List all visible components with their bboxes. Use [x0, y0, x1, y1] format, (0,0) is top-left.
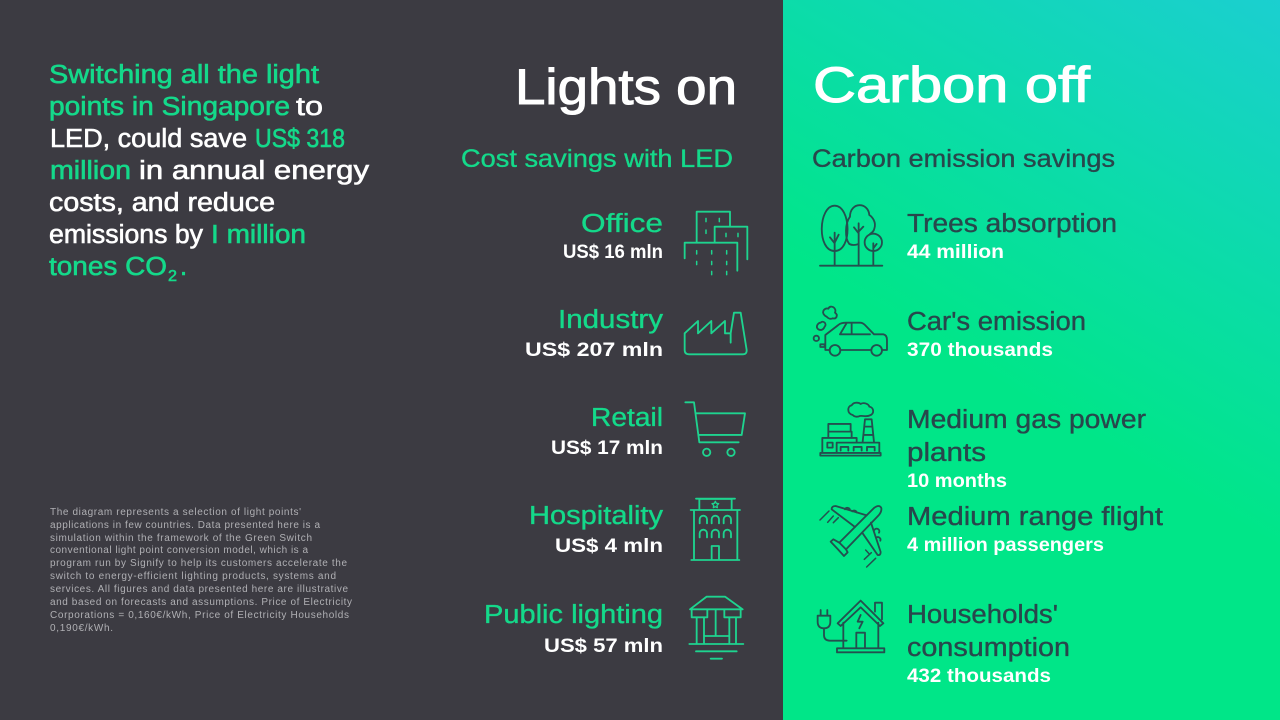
icon: hotel	[691, 499, 740, 560]
intro paragraph: costs, and reduce	[49, 189, 275, 217]
intro paragraph: LED, could save	[50, 125, 247, 153]
row: Medium gas power plants: Medium gas power	[907, 406, 1147, 434]
row: Medium range flight: Medium range flight	[907, 503, 1163, 531]
row: Trees absorption	[907, 210, 1117, 263]
row: Medium range flight: 4 million passengers	[907, 535, 1104, 556]
row: Car's emission: Car's emission	[907, 308, 1086, 336]
intro paragraph: .	[180, 253, 187, 281]
row: Industry: Industry	[558, 306, 663, 334]
icon: airplane	[820, 506, 881, 567]
intro paragraph: million	[50, 157, 131, 185]
row: Hospitality: US$ 4 mln	[555, 536, 663, 557]
footnote text block	[50, 507, 352, 634]
icon: office buildings	[685, 212, 747, 275]
icon: factory	[685, 313, 747, 354]
row: Households' consumption: 432 thousands	[907, 666, 1051, 687]
intro paragraph: emissions by	[49, 221, 203, 249]
row: Medium gas power plants: 10 months	[907, 471, 1007, 492]
intro paragraph	[49, 61, 369, 285]
row: Industry	[525, 306, 663, 361]
row: Medium gas power plants	[907, 406, 1147, 492]
row: Households' consumption	[907, 601, 1070, 687]
row: Hospitality	[529, 502, 663, 557]
row: Car's emission: 370 thousands	[907, 340, 1053, 361]
intro paragraph: in annual energy	[139, 157, 369, 185]
row: Retail: US$ 17 mln	[551, 438, 663, 459]
row: Households' consumption: Households'	[907, 601, 1058, 629]
intro paragraph: to	[296, 93, 323, 121]
row: Medium gas power plants: plants	[907, 439, 986, 467]
intro paragraph: Switching all the light	[49, 61, 319, 89]
row: Public lighting: Public lighting	[484, 601, 663, 629]
icon: public building	[689, 597, 743, 659]
row: Industry: US$ 207 mln	[525, 340, 663, 361]
footnote text block: 0,190€/kWh.	[50, 623, 113, 634]
heading: Lights on: Lights on	[515, 59, 737, 115]
row: Office: Office	[581, 210, 663, 238]
row: Trees absorption: Trees absorption	[907, 210, 1117, 238]
row: Trees absorption: 44 million	[907, 242, 1004, 263]
intro paragraph: points in Singapore	[49, 93, 290, 121]
row: Medium range flight	[907, 503, 1163, 556]
row: Retail: Retail	[591, 404, 663, 432]
row: Public lighting: US$ 57 mln	[544, 636, 663, 657]
row: Public lighting	[484, 601, 663, 657]
footnote text block: switch to energy-efficient lighting products, systems and	[50, 571, 336, 582]
panel: dark background	[0, 0, 783, 720]
icon: house with plug	[818, 601, 884, 652]
footnote text block: services. All figures and data presented here are illustrative	[50, 584, 348, 595]
subheading: Carbon emission savings: Carbon emission savings	[812, 145, 1115, 173]
heading: Carbon off: Carbon off	[813, 57, 1090, 113]
intro paragraph: US$ 318	[255, 125, 345, 153]
footnote text block: The diagram represents a selection of light points'	[50, 507, 301, 518]
footnote text block: applications in few countries. Data presented here is a	[50, 520, 320, 531]
subheading: Cost savings with LED: Cost savings with LED	[461, 145, 733, 173]
footnote text block: Corporations = 0,160€/kWh, Price of Electricity Households	[50, 610, 349, 621]
footnote text block: and based on forecasts and assumptions. Price of Electricity	[50, 597, 352, 608]
footnote text block: program run by Signify to help its customers accelerate the	[50, 558, 347, 569]
panel: green gradient background	[783, 0, 1280, 720]
icon: trees	[820, 205, 882, 266]
row: Hospitality: Hospitality	[529, 502, 663, 530]
footnote text block: simulation within the framework of the Green Switch	[50, 533, 312, 544]
row: Office	[563, 210, 663, 263]
icon: shopping cart	[685, 402, 745, 456]
intro paragraph: tones CO	[49, 253, 167, 281]
row: Households' consumption: consumption	[907, 634, 1070, 662]
intro paragraph: I million	[211, 221, 306, 249]
intro paragraph: 2	[168, 268, 177, 285]
footnote text block: conventional light point conversion model, which is a	[50, 545, 308, 556]
row: Retail	[551, 404, 663, 459]
icon: power plant	[820, 403, 881, 456]
row: Car's emission	[907, 308, 1086, 361]
icon: car with smoke	[814, 307, 887, 356]
row: Office: US$ 16 mln	[563, 242, 663, 263]
